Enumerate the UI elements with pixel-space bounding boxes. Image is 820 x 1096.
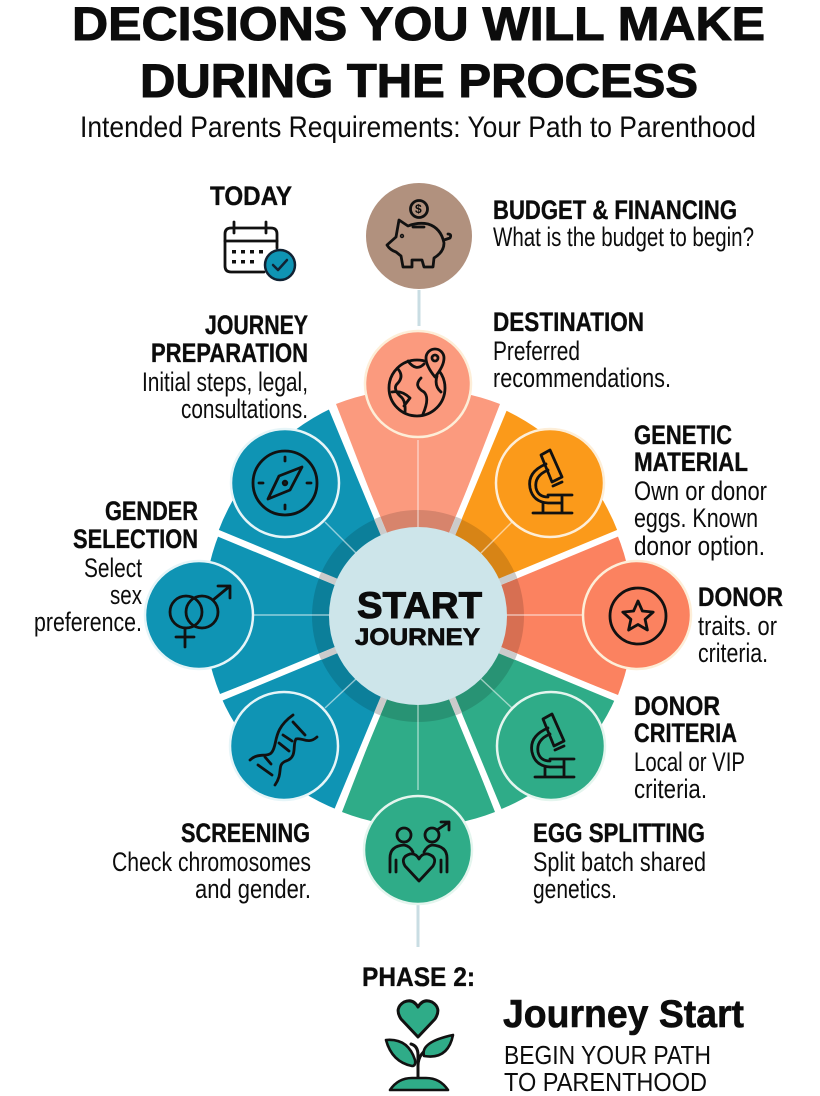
label: donor criteria: Local or VIP <box>634 747 745 777</box>
center hub <box>329 527 507 705</box>
label: budget and financing: BUDGET & FINANCING <box>493 195 737 225</box>
icon: microscope node, genetic material <box>496 429 604 537</box>
spokes <box>248 440 588 790</box>
label: screening: SCREENING <box>181 818 310 848</box>
label: donor criteria: DONOR <box>634 691 720 721</box>
label: egg splitting: genetics. <box>533 874 617 904</box>
icon: piggy bank node <box>366 183 472 289</box>
label: gender selection: Select <box>84 553 142 583</box>
label: genetic material: eggs. Known <box>634 503 758 533</box>
label: donor traits: DONOR <box>698 582 783 612</box>
icon: DNA node <box>230 692 338 800</box>
label: destination <box>493 307 671 393</box>
radial wheel <box>196 389 640 838</box>
label: journey preparation: consultations. <box>181 394 308 424</box>
label: donor criteria: CRITERIA <box>634 718 737 748</box>
wedge: donor criteria <box>418 616 616 810</box>
label: donor criteria <box>634 691 745 804</box>
phase 2 label: PHASE 2: <box>362 962 475 992</box>
journey start tagline <box>504 1040 711 1096</box>
wedge: screening <box>221 616 418 810</box>
label: genetic material: Own or donor <box>634 476 767 506</box>
wedge: destination <box>336 389 500 616</box>
icon: microscope node, donor criteria <box>497 692 605 800</box>
title: DURING THE PROCESS <box>140 54 698 107</box>
icon: star node <box>583 561 691 669</box>
label: gender selection: GENDER <box>105 496 198 526</box>
label: donor traits: criteria. <box>698 638 768 668</box>
wedge: gender selection <box>204 534 418 694</box>
label: egg splitting: Split batch shared <box>533 847 706 877</box>
label: genetic material: donor option. <box>634 531 765 561</box>
label: journey preparation: JOURNEY <box>205 310 308 340</box>
label: journey preparation <box>142 310 308 424</box>
icon: couple heart node <box>364 796 472 904</box>
journey start heading: Journey Start <box>503 993 744 1036</box>
label: egg splitting <box>533 818 706 904</box>
label: gender selection: preference. <box>34 607 142 637</box>
label: journey preparation: PREPARATION <box>151 338 308 368</box>
label: genetic material: GENETIC <box>634 420 732 450</box>
label: genetic material <box>634 420 767 561</box>
label: screening <box>112 818 311 904</box>
label: screening: and gender. <box>195 874 311 904</box>
label: budget and financing <box>493 195 754 252</box>
journey start tagline: BEGIN YOUR PATH <box>504 1040 711 1070</box>
icon: piggy bank node: $ <box>415 202 422 216</box>
center hub: JOURNEY <box>355 624 480 651</box>
ring gap segments <box>320 518 516 714</box>
icon: globe node <box>365 331 471 437</box>
label: donor traits: traits. or <box>698 611 777 641</box>
icon: calendar check <box>225 222 295 280</box>
label: gender selection: SELECTION <box>73 524 198 554</box>
wedge: egg splitting <box>342 616 495 826</box>
connector: budget to destination <box>418 290 420 326</box>
icon: gender symbols node <box>145 561 253 669</box>
label: donor criteria: criteria. <box>634 774 707 804</box>
label: destination: recommendations. <box>493 363 671 393</box>
label: journey preparation: Initial steps, legal, <box>142 367 308 397</box>
wedge gaps <box>196 394 640 838</box>
wedge: donor traits <box>418 534 633 695</box>
label: donor traits <box>698 582 783 668</box>
label: destination: DESTINATION <box>493 307 644 337</box>
label: screening: Check chromosomes <box>112 847 311 877</box>
wedge: journey preparation <box>218 408 418 616</box>
inner dark ring <box>312 510 524 722</box>
icon: heart plant <box>386 1001 453 1090</box>
label: destination: Preferred <box>493 336 580 366</box>
wedge: genetic material <box>418 410 618 616</box>
label: gender selection: sex <box>110 580 142 610</box>
icon: compass node <box>231 429 339 537</box>
label: egg splitting: EGG SPLITTING <box>533 818 705 848</box>
center hub: START <box>357 585 482 626</box>
label: gender selection <box>34 496 198 637</box>
title <box>72 0 765 107</box>
connector: bottom to phase 2 <box>416 905 420 947</box>
label: genetic material: MATERIAL <box>634 447 748 477</box>
today label: TODAY <box>210 181 292 211</box>
